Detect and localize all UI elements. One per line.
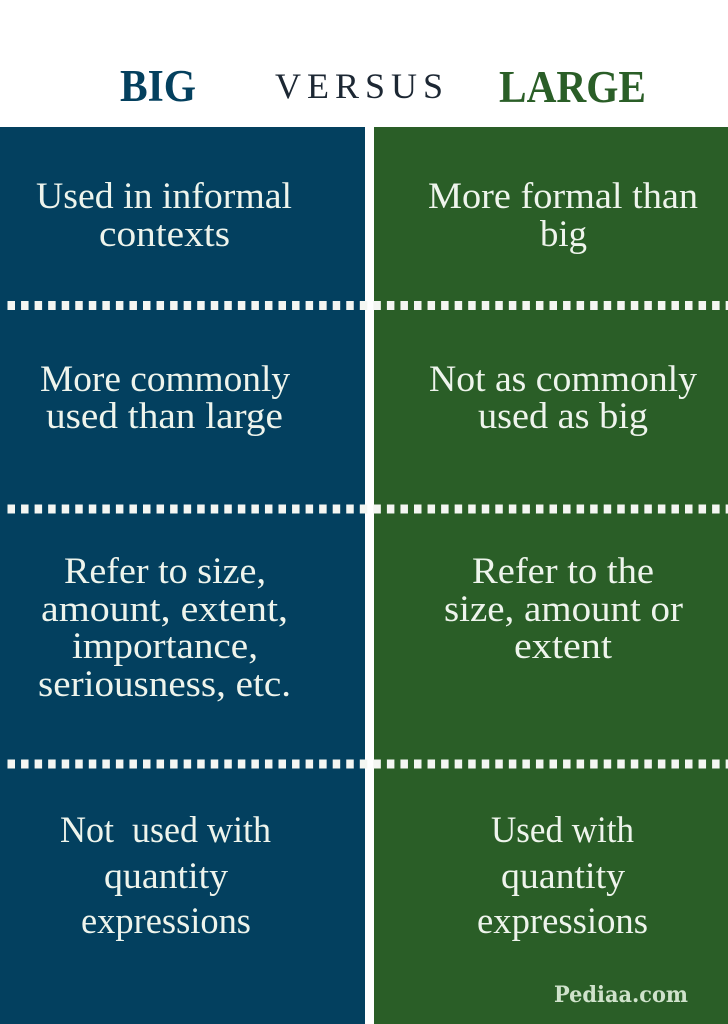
logo: Pediaa.com: Pediaa.com bbox=[554, 982, 688, 1008]
large: refers to size amount extent bbox=[444, 551, 683, 667]
large: more formal bbox=[428, 176, 698, 255]
row 3 divider bbox=[8, 760, 728, 768]
header bbox=[120, 61, 646, 112]
heading: VERSUS: VERSUS bbox=[275, 66, 443, 106]
heading: LARGE: LARGE bbox=[499, 62, 646, 112]
big: refers to size and more: seriousness, etc. bbox=[38, 664, 291, 705]
big: not used with quantity expressions: quantity bbox=[104, 856, 229, 897]
large: more formal: big bbox=[540, 214, 587, 255]
big: informal contexts: contexts bbox=[99, 214, 230, 255]
large: not as commonly used: Not as commonly bbox=[429, 359, 697, 400]
panel: big column bbox=[0, 127, 365, 1024]
big: not used with quantity expressions: expressions bbox=[81, 901, 251, 942]
large: refers to size amount extent: Refer to the bbox=[472, 551, 654, 592]
big: refers to size and more: amount, extent, bbox=[41, 589, 288, 630]
big: informal contexts: Used in informal bbox=[36, 176, 292, 217]
large: refers to size amount extent: size, amount or bbox=[444, 589, 683, 630]
row 1 divider bbox=[8, 301, 728, 310]
big: refers to size and more bbox=[38, 551, 291, 705]
panel: large column bbox=[374, 127, 728, 1024]
large: not as commonly used bbox=[429, 359, 697, 437]
big: more commonly used: More commonly bbox=[40, 359, 291, 400]
row 2 divider bbox=[8, 504, 728, 514]
big: more commonly used: used than large bbox=[46, 396, 283, 437]
large: refers to size amount extent: extent bbox=[514, 626, 613, 667]
large: used with quantity expressions: quantity bbox=[501, 856, 626, 897]
big: not used with quantity expressions: Not used with bbox=[60, 810, 271, 851]
large: used with quantity expressions: Used with bbox=[491, 810, 634, 851]
big: not used with quantity expressions bbox=[60, 810, 271, 942]
large: not as commonly used: used as big bbox=[478, 396, 648, 437]
large: used with quantity expressions bbox=[477, 810, 648, 942]
large: more formal: More formal than bbox=[428, 176, 698, 217]
heading: BIG: BIG bbox=[120, 61, 196, 111]
big: refers to size and more: importance, bbox=[72, 626, 258, 667]
big: refers to size and more: Refer to size, bbox=[64, 551, 266, 592]
large: used with quantity expressions: expressions bbox=[477, 901, 648, 942]
big: informal contexts bbox=[36, 176, 292, 255]
big: more commonly used bbox=[40, 359, 291, 437]
